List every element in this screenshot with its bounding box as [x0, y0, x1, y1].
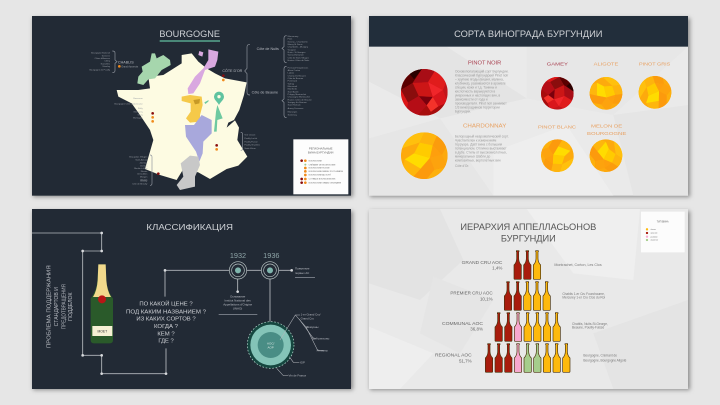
- grape: Chardonnay: [401, 124, 509, 179]
- grape: Chardonnay: терруара. Даёт вина с большим: [455, 143, 502, 147]
- grape: Gamey: GAMEY: [547, 61, 569, 67]
- grape: Chardonnay: Côte d'Or.: [455, 164, 469, 168]
- list: Mâconnais appellations: Pouilly Vinzelles: [244, 145, 260, 147]
- panel: Bourgogne map: [32, 16, 351, 196]
- region: Centre detail: [193, 99, 200, 104]
- list: Côte de Beaune appellations: Côte de Beaune: [288, 77, 304, 80]
- list: Mâconnais appellations: Viré Clessé: [244, 134, 256, 137]
- grape: Chardonnay: Белорощный неароматический сорт.: [455, 135, 509, 139]
- list: Côte de Nuits appellations: Côte de Nuits Villages: [288, 56, 309, 59]
- low-poly background: [369, 209, 688, 389]
- list: Côte de Nuits appellations: Vosne-Romanée: [288, 55, 305, 57]
- list: Mâconnais appellations: Pouilly Loché: [244, 138, 258, 140]
- list: Côte de Beaune appellations: Chassagne Montrachet: [288, 96, 310, 99]
- row: Grand Cru: GRAND CRU AOC: [462, 260, 503, 265]
- grape: Melon de Bourgogne: MELON DE: [591, 124, 623, 130]
- questions text: КОГДА ?: [154, 324, 178, 330]
- list: Côte de Beaune appellations: Meursault: [288, 85, 298, 88]
- list: Côte de Beaune appellations: Saint Aubin: [288, 90, 299, 93]
- list: Côte de Beaune appellations: Auxey Duresses: [288, 107, 303, 110]
- grape: Melon de Bourgogne: [587, 124, 627, 175]
- row: Regional: REGIONAL AOC: [435, 353, 472, 358]
- note: INAO founded: [219, 294, 257, 315]
- brace lines: [112, 36, 287, 185]
- list: southern appellations: Côte de Brouilly: [132, 183, 148, 186]
- list: southern appellations: Saint-Amour: [135, 158, 148, 161]
- grape: Pinot Noir: специи, кожи и т.д. Танины и: [455, 85, 497, 89]
- vertical text: standards problem: ПРЕДОТВРАЩЕНИЯ: [61, 284, 67, 329]
- grape: Pinot Noir: [401, 61, 509, 116]
- grape: Pinot Noir: Основополагающий сорт Бургундии.: [455, 69, 509, 73]
- list: Côte de Nuits appellations: Chambolle - Musigny: [288, 47, 309, 49]
- frame lines: [32, 233, 292, 374]
- list: Côte de Beaune appellations: Savigny lès Beaune: [288, 102, 308, 104]
- grape: Pinot Blanc: PINOT BLANC: [538, 124, 576, 130]
- list: Côte de Beaune appellations: Hautes Côtes de Beaune: [288, 98, 313, 101]
- legend box: BOURGOGNE ALIGOTÉ: [309, 174, 332, 177]
- region: Chablis: [137, 53, 171, 85]
- ring labels: Комунны: [307, 325, 318, 329]
- grape: Pinot Noir: 1/3 виноградников территории: [455, 105, 500, 109]
- list: southern appellations: Chiroubles: [137, 173, 147, 176]
- list: Côte de Beaune appellations: Volnay: [288, 83, 295, 85]
- row: Communal: 36,8%: [470, 327, 483, 332]
- ring labels: IGP: [300, 360, 305, 364]
- list: Chablis appellations: Bourgogne de Pouilly: [89, 69, 111, 72]
- region: Jura spot: [204, 100, 209, 104]
- pyramid rings chart: AOC/: [267, 342, 274, 346]
- panel: classification: [32, 209, 351, 389]
- low-poly background: [369, 47, 688, 196]
- timeline: 1932: [229, 251, 247, 279]
- row: Communal: [442, 313, 608, 341]
- legend: красное: [651, 233, 657, 235]
- list: southern appellations: Moulin à Vent: [134, 167, 148, 170]
- legend box: [293, 139, 348, 194]
- markers: [118, 65, 225, 175]
- list: Côte de Beaune appellations: Pernand Vergelesses: [288, 66, 308, 69]
- timeline: 1936: 1936: [263, 251, 279, 260]
- title underline: [160, 40, 220, 42]
- label: Côte de Nuits: Côte de Nuits: [257, 47, 279, 51]
- grape: Aligote: [584, 61, 628, 116]
- note: INAO founded: Appellations d'Origine: [223, 302, 252, 306]
- legend box: BOURGOGNE ROUGE: [309, 168, 330, 170]
- grape: Pinot Blanc: [538, 124, 576, 175]
- list: southern appellations: Morgon: [140, 176, 148, 179]
- legend box: ВИНА БУРГУНДИИ: [308, 150, 333, 154]
- row: Communal: Chablis, Nuits-St-George,: [572, 322, 608, 326]
- panel: grape varieties: [369, 16, 688, 196]
- region: Mâcon: [185, 115, 212, 162]
- map pin: [214, 92, 224, 105]
- ring labels: Суб-регионы: [312, 336, 329, 340]
- pyramid rings chart: [247, 322, 294, 368]
- list: Côte de Nuits appellations: Nuits - St Georges: [288, 51, 305, 54]
- grape: Melon de Bourgogne: BOURGOGNE: [587, 131, 627, 137]
- note: first AC: [295, 266, 315, 278]
- leader lines: [277, 315, 324, 376]
- questions text: ПО КАКОЙ ЦЕНЕ ?: [139, 300, 193, 308]
- questions text: ИЗ КАКИХ СОРТОВ ?: [136, 317, 196, 323]
- list: Chablis appellations: Saint-Bris: [101, 62, 110, 65]
- grape: Pinot Noir: умеренных и настоящих вин, в: [455, 93, 501, 97]
- legend: [641, 212, 685, 252]
- legend: белое: [651, 229, 656, 231]
- timeline: 1936: [261, 251, 279, 279]
- list: southern appellations: Beaujolais Villages: [129, 156, 147, 158]
- legend box: BOURGOGNE PASSE-TOUT-GRAINS: [309, 170, 344, 173]
- note: first AC: Появление: [295, 266, 310, 270]
- list: Côte de Nuits appellations: Morey St Denis: [288, 43, 302, 46]
- timeline: 1932: 1932: [230, 251, 246, 260]
- icon: champagne bottle: [91, 264, 113, 343]
- list: Chablis appellations: Tonnerre: [101, 54, 111, 57]
- row: Regional: Bourgogne, Bourgogne Aligoté: [583, 358, 627, 362]
- ring labels: Vin de France: [289, 374, 307, 378]
- icon: champagne bottle: MOET: [98, 329, 107, 333]
- list: western appellations: Givry: [138, 114, 144, 117]
- list: Côte de Beaune appellations: Santenay: [288, 114, 298, 117]
- row: Communal: Beaune, Pouilly-Fuissé: [572, 326, 605, 330]
- list: Côte de Nuits appellations: Gevrey - Chambertin: [288, 40, 308, 43]
- region: Rhône: [177, 156, 200, 190]
- vertical text: standards problem: ПРОБЛЕМА ПОДДЕРЖАНИЯ: [47, 265, 53, 348]
- ring labels: Grand Cru: [301, 317, 314, 321]
- list: Côte de Beaune appellations: Monthelie: [288, 88, 298, 91]
- grape: Gamey: [541, 61, 574, 110]
- title: ИЕРАРХИЯ АППЕЛЛАСЬОНОВ: [460, 222, 596, 232]
- grape: Pinot Noir: – хрупкие ягоды (вишня, малина,: [455, 77, 504, 81]
- note: INAO founded: (INAO): [233, 306, 242, 310]
- legend box: COTEAUX BOURGUIGNONS: [309, 178, 336, 181]
- row: Grand Cru: Montrachet, Corton, Les Clos: [554, 263, 602, 267]
- title: БУРГУНДИИ: [501, 233, 556, 243]
- note: INAO founded: Основание: [230, 294, 246, 298]
- note: INAO founded: Institut National des: [225, 298, 251, 302]
- legend box: CRÉMANT DE BOURGOGNE: [309, 163, 336, 166]
- row: Premier Cru: Chablis 1-er Cru Fourchaume,: [562, 292, 605, 296]
- list: western appellations: Mercurey: [134, 111, 144, 114]
- note: first AC: первых AC: [295, 271, 309, 275]
- list: Mâconnais appellations: Saint-Véran: [244, 147, 257, 150]
- row: Regional: 51,7%: [459, 358, 472, 363]
- map of France: [117, 49, 247, 190]
- region: Loire spot: [198, 51, 203, 57]
- panel: appellation hierarchy: [369, 209, 688, 389]
- list: western appellations: Rully: [138, 108, 144, 110]
- list: Côte de Beaune appellations: Pommard: [288, 80, 298, 83]
- list: Côte de Nuits appellations: Marsannay: [288, 35, 299, 38]
- list: Côte de Beaune appellations: Ladoix: [288, 73, 295, 75]
- region: Centre: [182, 95, 203, 123]
- region: Côte d'Or north: [188, 49, 218, 94]
- list: southern appellations: Juliénas: [139, 162, 147, 164]
- vertical text: standards problem: СТАНДАРТОВ И: [54, 287, 60, 326]
- legend box: BOURGOGNE: [309, 160, 322, 162]
- grape: Pinot Noir: PINOT NOIR: [468, 61, 502, 67]
- grape: Chardonnay: потенциалом. Отлично выстаивает: [455, 147, 507, 151]
- grape: Chardonnay: минеральных Шабли до: [455, 155, 491, 159]
- title: СОРТА ВИНОГРАДА БУРГУНДИИ: [454, 29, 602, 39]
- pyramid rings chart: AOP: [268, 346, 274, 350]
- grape: Pinot Gris: [632, 61, 678, 115]
- grape: Pinot Gris: PINOT GRIS: [639, 61, 671, 67]
- row: Communal: COMMUNAL AOC: [442, 321, 484, 326]
- grape: Chardonnay: композитных, вертолетных вин: [455, 159, 501, 163]
- row: Premier Cru: 10,1%: [480, 296, 493, 301]
- row: Regional: [435, 344, 627, 372]
- grape: Pinot Noir: кислотность варьируются в: [455, 89, 496, 93]
- row: Grand Cru: [462, 251, 602, 279]
- list: southern appellations: Fleurie: [141, 170, 148, 173]
- questions text: КЕМ ?: [157, 331, 175, 337]
- grape: Chardonnay: Чувствителен к изменениям: [455, 139, 496, 143]
- list: Côte de Nuits appellations: Hautes Côtes de Nuits: [288, 59, 309, 62]
- header band: [369, 16, 688, 47]
- row: Regional: Bourgogne, Crémant de: [583, 354, 617, 358]
- list: Mâconnais appellations: Pouilly Fuissé: [244, 141, 258, 143]
- grape: Pinot Noir: зависимости от года и: [455, 97, 488, 101]
- list: Côte de Beaune appellations: Maranges: [288, 110, 297, 113]
- row: Grand Cru: 1,4%: [492, 265, 502, 270]
- list: Côte de Beaune appellations: Puligny Montrachet: [288, 93, 307, 96]
- questions text: ПОД КАКИМ НАЗВАНИЕМ ?: [126, 309, 206, 315]
- row: Premier Cru: [450, 282, 605, 310]
- legend box: BOURGOGNE GRAND ORDINAIRE: [309, 181, 342, 184]
- list: southern appellations: Brouilly: [140, 180, 148, 183]
- list: Côte de Nuits appellations: Fixin: [288, 39, 293, 41]
- grape: Pinot Noir: Классический бургундский Pinot noir: [455, 73, 508, 77]
- label: Côte d'Or: CÔTE D'OR: [222, 68, 243, 73]
- row: Premier Cru: Mercurey 1-er Cru Clos du Roi: [562, 296, 605, 300]
- frame nodes: [81, 232, 293, 375]
- grape: Chardonnay: CHARDONNAY: [463, 124, 507, 130]
- legend box: РЕГИОНАЛЬНЫЕ: [309, 146, 333, 150]
- list: southern appellations: Chénas: [140, 165, 147, 167]
- legend: ТИП ВИНА: [657, 221, 669, 224]
- label: Chablis: CHABLIS: [118, 61, 134, 65]
- list: Chablis appellations: Bourgogne Epineuil: [91, 52, 111, 55]
- list: Côte de Beaune appellations: Chorey lès Beaune: [288, 74, 307, 77]
- list: Côte de Beaune appellations: Saint Romain: [288, 104, 301, 107]
- list: Chablis appellations: Vézelay: [102, 66, 111, 68]
- list: western appellations: Bourgogne Côte Chalonnaise: [114, 102, 143, 105]
- label: Chablis sub: Grand Auxerrois: [121, 65, 139, 68]
- list: southern appellations: Régnié: [140, 179, 148, 181]
- list: western appellations: Montagny: [133, 117, 144, 120]
- ring labels: Регионы: [317, 349, 328, 353]
- list: Côte de Beaune appellations: Aloxe Corton: [288, 69, 301, 72]
- label: Côte de Beaune: Côte de Beaune: [252, 91, 278, 95]
- grape: Pinot Noir: клубника), развиваются в аромате: [455, 81, 506, 85]
- row: Premier Cru: PREMIER CRU AOC: [450, 291, 493, 296]
- legend: розовое: [651, 236, 658, 238]
- title: КЛАССИФИКАЦИЯ: [146, 223, 233, 232]
- grape: Chardonnay: в дубе. Стиль от высококислотных,: [455, 151, 507, 155]
- list: Chablis appellations: Chitry: [104, 60, 111, 63]
- grape: Pinot Noir: производителя. Pinot noir занимает: [455, 101, 507, 105]
- ring labels: 1-er Grand Cru/: [301, 312, 321, 316]
- vertical text: standards problem: ПОДДЕЛОК: [68, 292, 74, 321]
- region: Jura: [214, 105, 223, 132]
- grape: Aligote: ALIGOTE: [594, 61, 619, 67]
- grape: Pinot Noir: Бургундии.: [455, 109, 471, 113]
- list: Chablis appellations: Côtes d'Auxerre: [95, 57, 111, 60]
- title: Bourgogne: BOURGOGNE: [159, 29, 220, 39]
- list: western appellations: Bouzeron: [133, 97, 143, 100]
- legend: игристое: [651, 240, 658, 242]
- questions text: ГДЕ ?: [158, 339, 174, 345]
- list: Côte de Nuits appellations: Vougeot: [288, 48, 296, 51]
